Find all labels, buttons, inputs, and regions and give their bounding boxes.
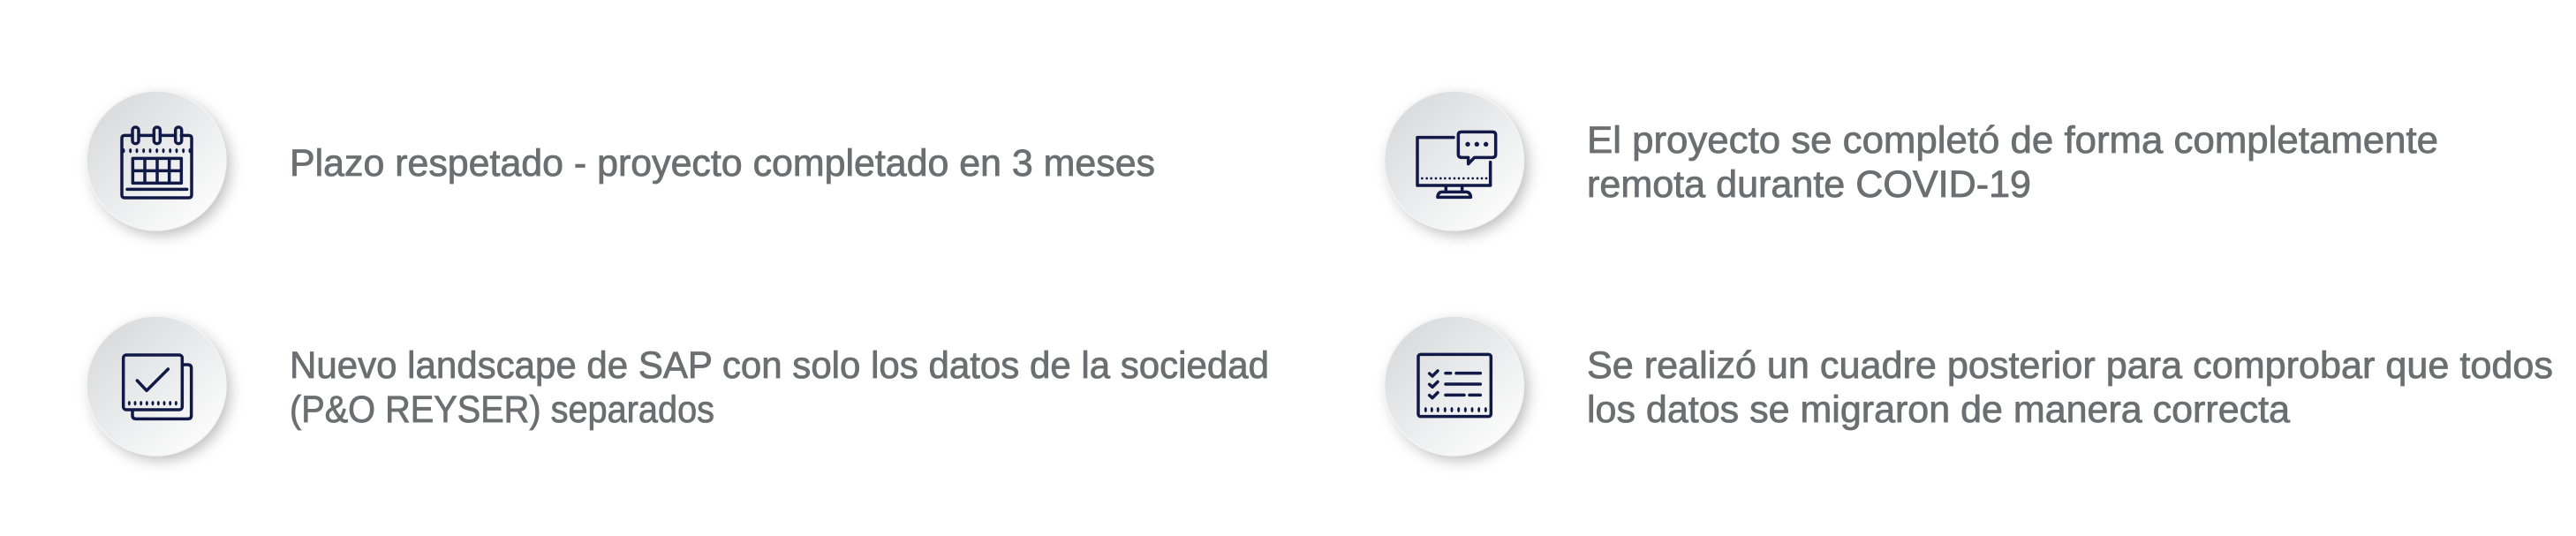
text: nuevo landscape: (P&O REYSER) separados (290, 389, 714, 431)
text: nuevo landscape (290, 344, 1269, 431)
text: plazo respetado: Plazo respetado - proyecto completado en 3 meses (290, 142, 1155, 185)
icon badge: checked document (87, 316, 230, 460)
item: nuevo landscape (87, 316, 1269, 460)
text: cuadre posterior: Se realizó un cuadre posterior para comprobar que todos (1587, 344, 2553, 387)
text: cuadre posterior: los datos se migraron de manera correcta (1587, 389, 2290, 431)
icon badge: monitor with chat bubble (1385, 91, 1528, 235)
text: proyecto remoto: El proyecto se completó de forma completamente (1587, 119, 2438, 162)
text: proyecto remoto (1587, 119, 2438, 206)
icon badge: checklist (1385, 316, 1528, 460)
text: proyecto remoto: remota durante COVID-19 (1587, 163, 2031, 206)
text: nuevo landscape: Nuevo landscape de SAP con solo los datos de la sociedad (290, 344, 1269, 387)
item: plazo respetado (87, 91, 1155, 235)
item: cuadre posterior (1385, 316, 2553, 460)
icon badge: calendar (87, 91, 230, 235)
text: cuadre posterior (1587, 344, 2553, 431)
item: proyecto remoto (1385, 91, 2438, 235)
